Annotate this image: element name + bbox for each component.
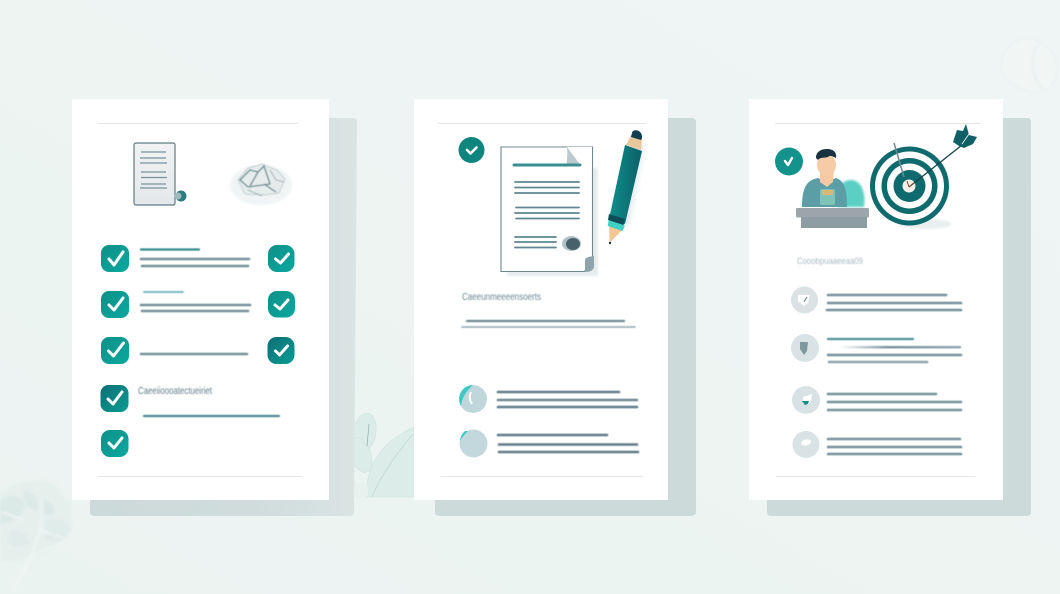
icon: check badge xyxy=(458,137,484,163)
bullet 1 xyxy=(791,286,818,314)
label: Caeeunmeeeensoerts xyxy=(462,292,541,303)
text lines bullet 1 xyxy=(498,392,637,407)
text line row 4 xyxy=(144,415,279,417)
icon: pen xyxy=(608,130,645,244)
illustration: target with arrow xyxy=(870,124,977,229)
checkbox row 4 xyxy=(100,385,128,412)
text lines bullet 4 xyxy=(828,439,961,454)
text line row 3 xyxy=(141,353,247,355)
text lines bullet 2 xyxy=(828,339,961,362)
divider lines xyxy=(462,321,635,327)
text lines bullet 3 xyxy=(828,394,961,410)
icon: document xyxy=(134,143,186,205)
checkbox row 5 xyxy=(101,430,128,457)
text lines row 1 xyxy=(141,250,249,266)
label: Cooobpuaaeeaa09 xyxy=(797,256,863,266)
panel: checklist xyxy=(72,99,329,500)
checkbox row 3 right xyxy=(268,337,294,364)
checkbox row 2 left xyxy=(101,291,129,318)
bullet 2 xyxy=(791,334,819,362)
panel: goal xyxy=(749,99,1003,500)
icon: check badge xyxy=(775,148,803,176)
text lines bullet 2 xyxy=(498,435,638,452)
decoration: leaves bottom left xyxy=(0,480,72,590)
label row 4: Caeeiioooatectueiriet xyxy=(138,386,212,397)
checkbox row 1 right xyxy=(268,245,294,272)
bullet 4 xyxy=(792,431,820,458)
bullet 1 xyxy=(459,385,487,413)
decoration: bubble top right xyxy=(1002,38,1057,92)
checkbox row 1 left xyxy=(101,245,129,272)
text lines bullet 1 xyxy=(827,295,961,310)
panel: contract document xyxy=(414,99,668,500)
checkbox row 3 left xyxy=(101,337,129,364)
bullet 3 xyxy=(792,386,820,414)
shadow: panel 3 xyxy=(767,118,1031,516)
illustration: person at desk xyxy=(796,149,869,228)
bullet 2 xyxy=(460,430,488,458)
icon: crumpled paper xyxy=(230,164,292,205)
shadow: panel 1 xyxy=(90,118,357,516)
shadow: panel 2 xyxy=(435,118,696,516)
decoration: leaves between panels xyxy=(346,412,414,498)
text lines row 2 xyxy=(141,292,250,311)
checkbox row 2 right xyxy=(268,291,295,318)
illustration: contract page xyxy=(501,147,598,276)
